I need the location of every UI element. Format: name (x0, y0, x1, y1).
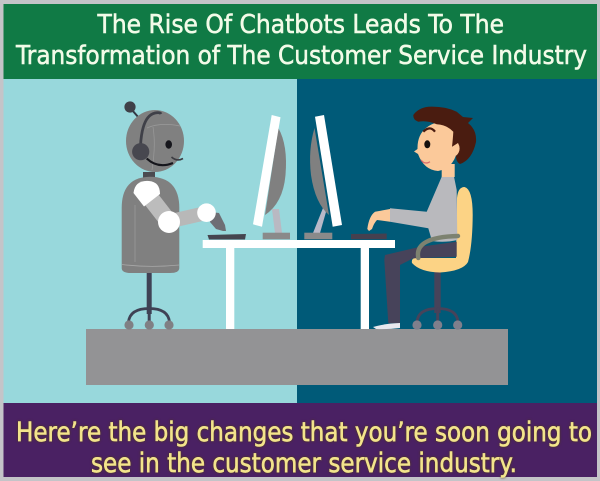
panel: chatbot side background (4, 79, 297, 403)
desk (203, 240, 395, 329)
office chair (412, 187, 473, 330)
panel: human side background (297, 79, 597, 403)
title banner (4, 4, 597, 79)
robot body (122, 172, 179, 273)
robot chatbot (122, 101, 226, 330)
robot keyboard (208, 234, 246, 240)
human head (413, 107, 476, 177)
title banner: The Rise Of Chatbots Leads To The (97, 10, 504, 40)
trousers and shoe (373, 242, 457, 329)
human monitor (304, 115, 342, 239)
robot arm (134, 181, 226, 233)
bottom banner: see in the customer service industry. (91, 448, 517, 479)
robot head (126, 110, 184, 172)
human keyboard (351, 234, 387, 239)
armrest (418, 236, 458, 258)
floor platform (86, 329, 508, 385)
robot headset (132, 113, 161, 160)
hand (367, 209, 390, 231)
robot antenna (124, 101, 139, 118)
human agent (367, 107, 476, 330)
robot monitor (253, 115, 290, 239)
shirt (390, 173, 457, 242)
robot stand (124, 272, 174, 330)
bottom banner (4, 403, 597, 479)
